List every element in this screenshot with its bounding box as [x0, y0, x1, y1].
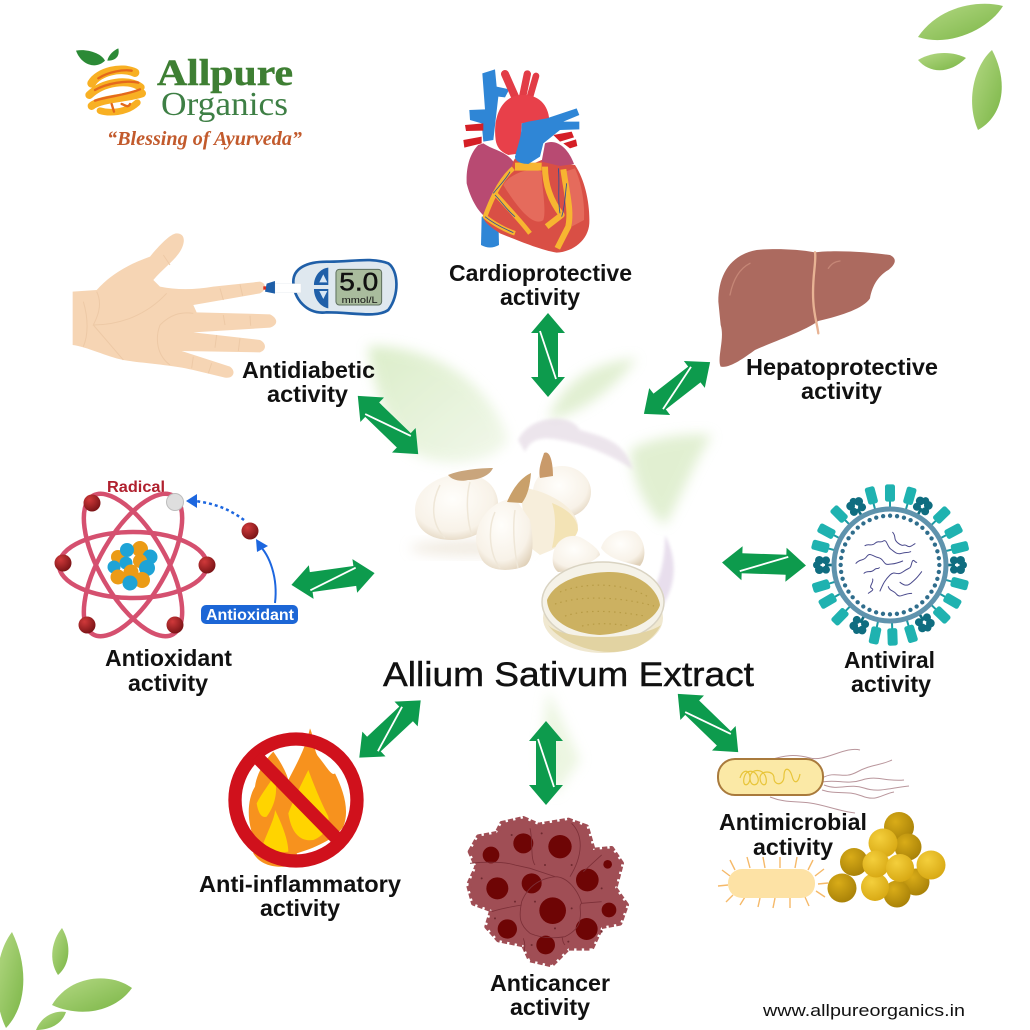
small cloves	[553, 536, 600, 572]
antioxidant tag: Antioxidant	[206, 607, 295, 624]
label: antiviral	[844, 647, 935, 697]
envelope	[834, 509, 946, 621]
icon: no inflammation	[235, 728, 357, 867]
arrows	[195, 501, 244, 520]
label: anticancer	[490, 970, 610, 1020]
label: cardioprotective: activity	[500, 284, 580, 310]
label: hepatoprotective: Hepatoprotective	[746, 354, 938, 380]
decoration: bottom left leaves	[0, 928, 132, 1030]
label: antidiabetic	[242, 357, 375, 407]
arrow: cardioprotective	[531, 313, 565, 397]
arrow: anti-inflammatory	[348, 688, 432, 770]
label: antiviral: activity	[851, 671, 931, 697]
label: antidiabetic: Antidiabetic	[242, 357, 375, 383]
title: Allium Sativum Extract	[383, 656, 755, 694]
background: faint leaves and garlic behind centre	[368, 346, 712, 795]
label: anti-inflammatory: activity	[260, 895, 340, 921]
wordmark: Allpure: Allpure	[157, 53, 293, 94]
base silhouette	[468, 818, 627, 965]
arrow: anticancer	[529, 721, 563, 805]
central image: garlic and powder	[410, 453, 664, 653]
glucose meter: 5.0	[339, 269, 378, 297]
label: cardioprotective	[449, 260, 632, 310]
arrow: hepatoprotective	[633, 349, 721, 427]
arrow: antimicrobial	[666, 682, 750, 764]
label: antioxidant	[105, 645, 232, 696]
icon: liver	[718, 249, 895, 367]
speckles	[481, 832, 603, 946]
genome	[856, 532, 922, 596]
website url: www.allpureorganics.in	[762, 1001, 965, 1020]
arrow: antioxidant	[289, 556, 377, 602]
shadow	[410, 540, 530, 556]
arrow: antidiabetic	[346, 384, 430, 466]
electrons	[54, 494, 258, 634]
icon: staphylococcus cluster	[828, 812, 946, 908]
cell boundaries	[470, 823, 602, 952]
icon: virus	[811, 484, 969, 646]
icon: hand with glucose meter	[73, 233, 396, 378]
orbits	[59, 479, 207, 651]
label: cardioprotective: Cardioprotective	[449, 260, 632, 286]
label: antiviral: Antiviral	[844, 647, 935, 673]
flames	[249, 728, 346, 867]
icon: heart	[463, 69, 589, 253]
label: anticancer: activity	[510, 994, 590, 1020]
open cloves	[520, 487, 578, 555]
garlic bulb front	[476, 473, 533, 570]
label: radical: Radical	[107, 479, 165, 496]
label: antimicrobial: activity	[753, 834, 833, 860]
garlic bulb right	[533, 453, 591, 518]
garlic bulb left	[415, 468, 498, 540]
icon: orange fruit	[76, 48, 142, 112]
label: hepatoprotective	[746, 354, 938, 404]
glucose meter	[263, 260, 396, 314]
wordmark: Organics: Organics	[161, 86, 288, 123]
icon: cancer cells	[468, 818, 627, 965]
arrow: antiviral	[721, 546, 807, 582]
tagline: “Blessing of Ayurveda”	[107, 128, 302, 150]
nuclei	[483, 833, 616, 954]
powder dish	[542, 562, 664, 653]
label: antioxidant: Antioxidant	[105, 645, 232, 671]
glucose meter: mmol/L	[342, 295, 378, 305]
prohibition sign	[235, 739, 357, 861]
label: antioxidant: activity	[128, 670, 208, 696]
label: anti-inflammatory	[199, 871, 401, 921]
icon: ciliated bacterium	[718, 857, 828, 908]
label: antimicrobial: Antimicrobial	[719, 809, 867, 835]
label: anticancer: Anticancer	[490, 970, 610, 996]
nucleus	[108, 541, 158, 590]
logo: Allpure Organics	[76, 48, 302, 150]
label: antidiabetic: activity	[267, 381, 348, 407]
icon: bacterium with flagella	[718, 749, 909, 813]
icon: antioxidant atom	[54, 479, 298, 651]
spikes	[811, 484, 969, 646]
label: hepatoprotective: activity	[801, 378, 882, 404]
hand	[73, 233, 276, 378]
label: antimicrobial	[719, 809, 867, 860]
decoration: top right leaves	[918, 4, 1003, 130]
label: anti-inflammatory: Anti-inflammatory	[199, 871, 401, 897]
